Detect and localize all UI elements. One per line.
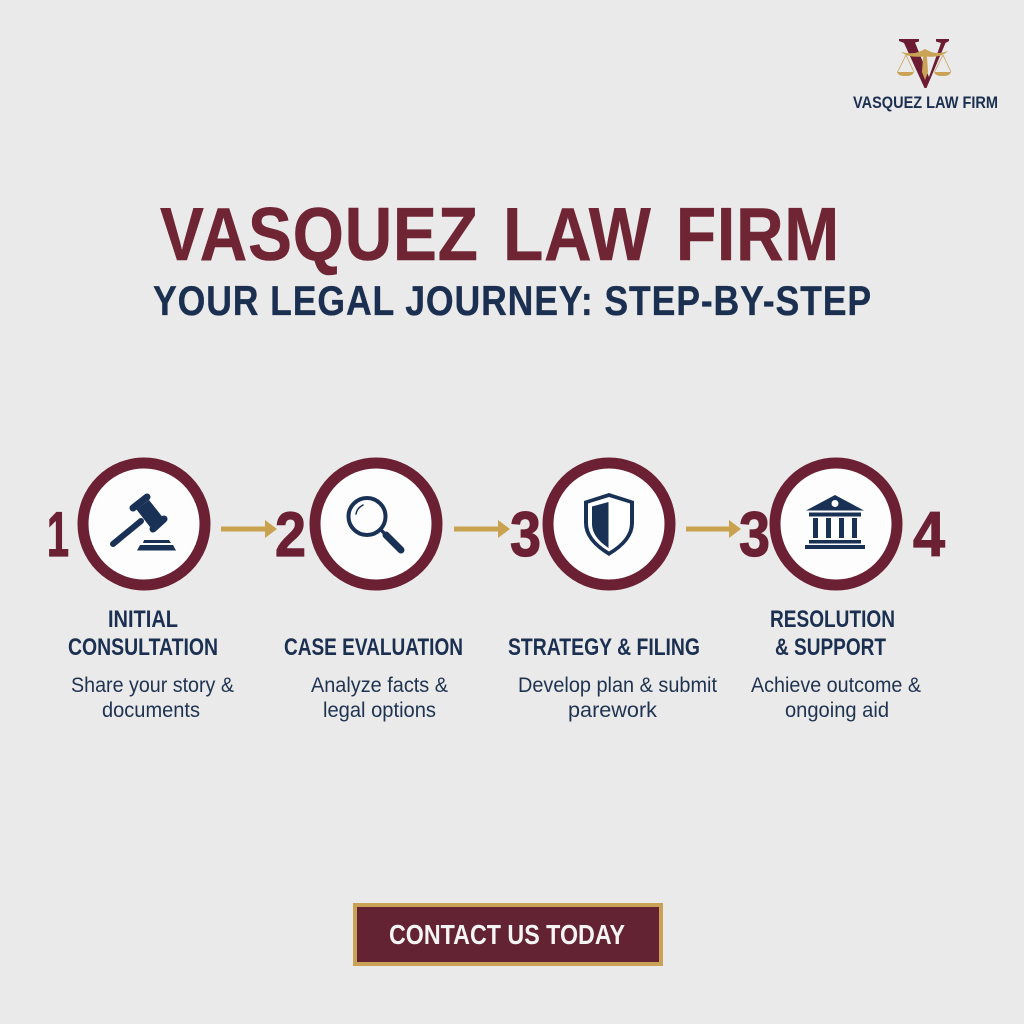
arrow 1 xyxy=(221,520,277,538)
circle 1 xyxy=(83,463,205,585)
circle 3 xyxy=(548,463,670,585)
step 3 xyxy=(508,463,717,722)
button: contact us today xyxy=(355,905,661,964)
number 1: 1 xyxy=(47,500,69,570)
logo text: VASQUEZ LAW FIRM xyxy=(853,94,998,112)
step 1 description: Share your story & xyxy=(71,673,234,697)
step 1: CONSULTATION xyxy=(68,634,218,661)
icon: shield xyxy=(584,493,634,556)
step 4: & SUPPORT xyxy=(775,634,886,661)
number 2: 2 xyxy=(275,500,306,570)
step 1: documents xyxy=(102,698,200,722)
number 4: 4 xyxy=(913,500,945,570)
step 2 xyxy=(275,463,463,722)
step 1 xyxy=(47,463,234,722)
step 2 heading: CASE EVALUATION xyxy=(284,634,463,661)
step 3 description: Develop plan & submit xyxy=(518,673,717,697)
step 4 heading: RESOLUTION xyxy=(770,606,895,633)
logo xyxy=(853,39,998,112)
step 2 description: Analyze facts & xyxy=(311,673,448,697)
step 3: parework xyxy=(568,698,657,722)
icon: magnifying glass xyxy=(348,498,401,550)
icon: courthouse xyxy=(805,495,865,549)
subtitle: YOUR LEGAL JOURNEY: STEP-BY-STEP xyxy=(153,277,872,324)
number 3: 3 xyxy=(510,500,541,570)
title: VASQUEZ LAW FIRM xyxy=(160,192,840,276)
number 3 repeated: 3 xyxy=(739,500,770,570)
circle 2 xyxy=(315,463,437,585)
icon: V and scales xyxy=(897,39,951,88)
circle 4 xyxy=(775,463,897,585)
arrow 3 xyxy=(686,520,741,538)
step 2: legal options xyxy=(323,698,436,722)
step 4: ongoing aid xyxy=(785,698,889,722)
button label: CONTACT US TODAY xyxy=(389,919,625,950)
step 4 xyxy=(739,463,945,722)
step 1 heading: INITIAL xyxy=(108,606,178,633)
step 4 description: Achieve outcome & xyxy=(751,673,921,697)
step 3 heading: STRATEGY & FILING xyxy=(508,634,700,661)
arrow 2 xyxy=(454,520,510,538)
icon: gavel xyxy=(113,497,176,550)
